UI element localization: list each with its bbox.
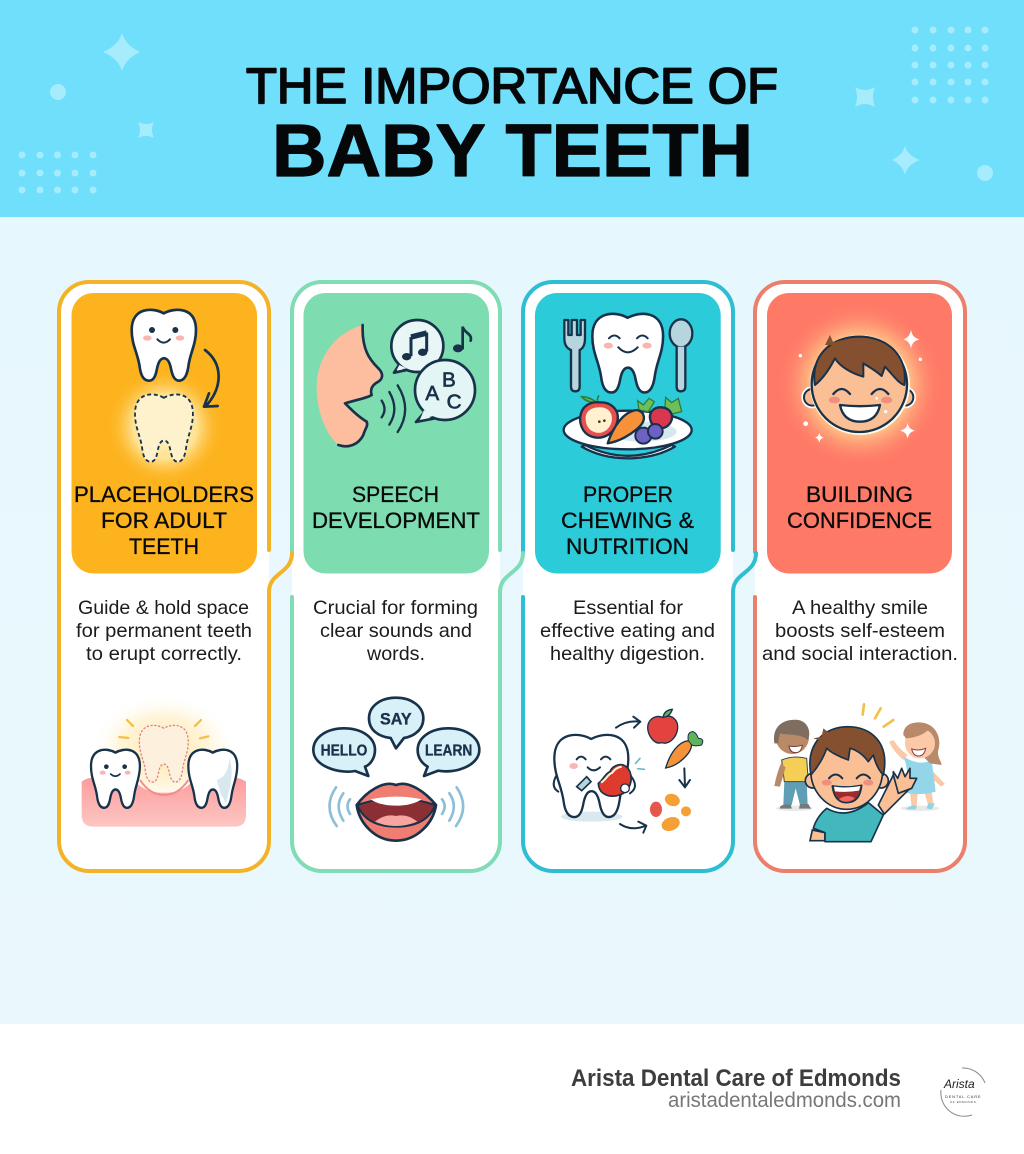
card 4: building confidence xyxy=(755,282,965,871)
title: BABY TEETH xyxy=(272,109,753,192)
heading: BUILDING xyxy=(806,482,913,507)
icon: words and talking mouth: LEARN xyxy=(425,743,472,760)
header banner xyxy=(0,0,1024,217)
connector arrow: card 3 to card 4 xyxy=(733,553,756,841)
heading xyxy=(561,482,694,559)
page background xyxy=(0,217,1024,1024)
card 3 lower border xyxy=(523,597,733,871)
heading: CHEWING & xyxy=(561,508,694,533)
description: effective eating and xyxy=(540,620,715,642)
footer website: aristadentaledmonds.com xyxy=(668,1089,901,1112)
heading: SPEECH xyxy=(352,482,439,507)
heading: TEETH xyxy=(129,534,199,559)
heading xyxy=(74,482,254,559)
description: for permanent teeth xyxy=(76,620,252,642)
heading: DEVELOPMENT xyxy=(312,508,480,533)
heading xyxy=(787,482,932,533)
description: words. xyxy=(366,643,425,665)
title xyxy=(246,58,778,192)
description xyxy=(313,597,478,665)
heading: PROPER xyxy=(583,482,673,507)
description: boosts self-esteem xyxy=(775,620,945,642)
heading xyxy=(312,482,480,533)
description: Guide & hold space xyxy=(78,597,249,619)
description xyxy=(540,597,715,665)
icon: words and talking mouth: HELLO xyxy=(321,743,367,760)
icon: speaking profile with bubbles: A xyxy=(425,382,439,405)
icon: tooth biting apple and digestion cycle xyxy=(554,709,703,833)
description: and social interaction. xyxy=(762,643,958,665)
icon: smiling boy with sparkles xyxy=(777,302,943,468)
description: clear sounds and xyxy=(320,620,472,642)
connector arrow: card 1 to card 2 xyxy=(269,553,292,841)
description: healthy digestion. xyxy=(550,643,705,665)
card 1: placeholders for adult teeth xyxy=(59,282,269,871)
icon: words and talking mouth xyxy=(313,698,479,841)
heading: FOR ADULT xyxy=(101,508,227,533)
connector arrow: card 2 to card 3 xyxy=(500,553,523,841)
icon: words and talking mouth: SAY xyxy=(380,709,412,728)
icon: speaking profile with bubbles xyxy=(317,320,475,446)
card 2: speech development xyxy=(292,282,500,871)
card 3: chewing and nutrition xyxy=(523,282,733,871)
footer brand name: Arista Dental Care of Edmonds xyxy=(571,1065,901,1092)
description: Essential for xyxy=(573,597,684,619)
logo: DENTAL CARE xyxy=(945,1094,981,1099)
card 2 lower border xyxy=(292,597,500,871)
icon: tooth with cutlery and plate xyxy=(564,314,692,458)
description: A healthy smile xyxy=(792,597,928,619)
icon: speaking profile with bubbles: B xyxy=(442,369,456,392)
icon: happy children waving xyxy=(774,704,945,842)
description xyxy=(76,597,252,665)
description: to erupt correctly. xyxy=(86,643,242,665)
footer xyxy=(0,1024,1024,1154)
logo xyxy=(941,1068,985,1116)
logo: Arista xyxy=(943,1077,975,1091)
logo: OF EDMONDS xyxy=(950,1100,976,1104)
icon: gap between teeth in gums xyxy=(82,693,246,827)
icon: tooth moving into placeholder xyxy=(107,310,223,485)
description xyxy=(762,597,958,665)
icon: speaking profile with bubbles: C xyxy=(447,390,462,413)
description: Crucial for forming xyxy=(313,597,478,619)
title: THE IMPORTANCE OF xyxy=(246,58,778,114)
card 1 lower border xyxy=(59,590,269,871)
heading: NUTRITION xyxy=(566,534,689,559)
heading: PLACEHOLDERS xyxy=(74,482,254,507)
heading: CONFIDENCE xyxy=(787,508,932,533)
